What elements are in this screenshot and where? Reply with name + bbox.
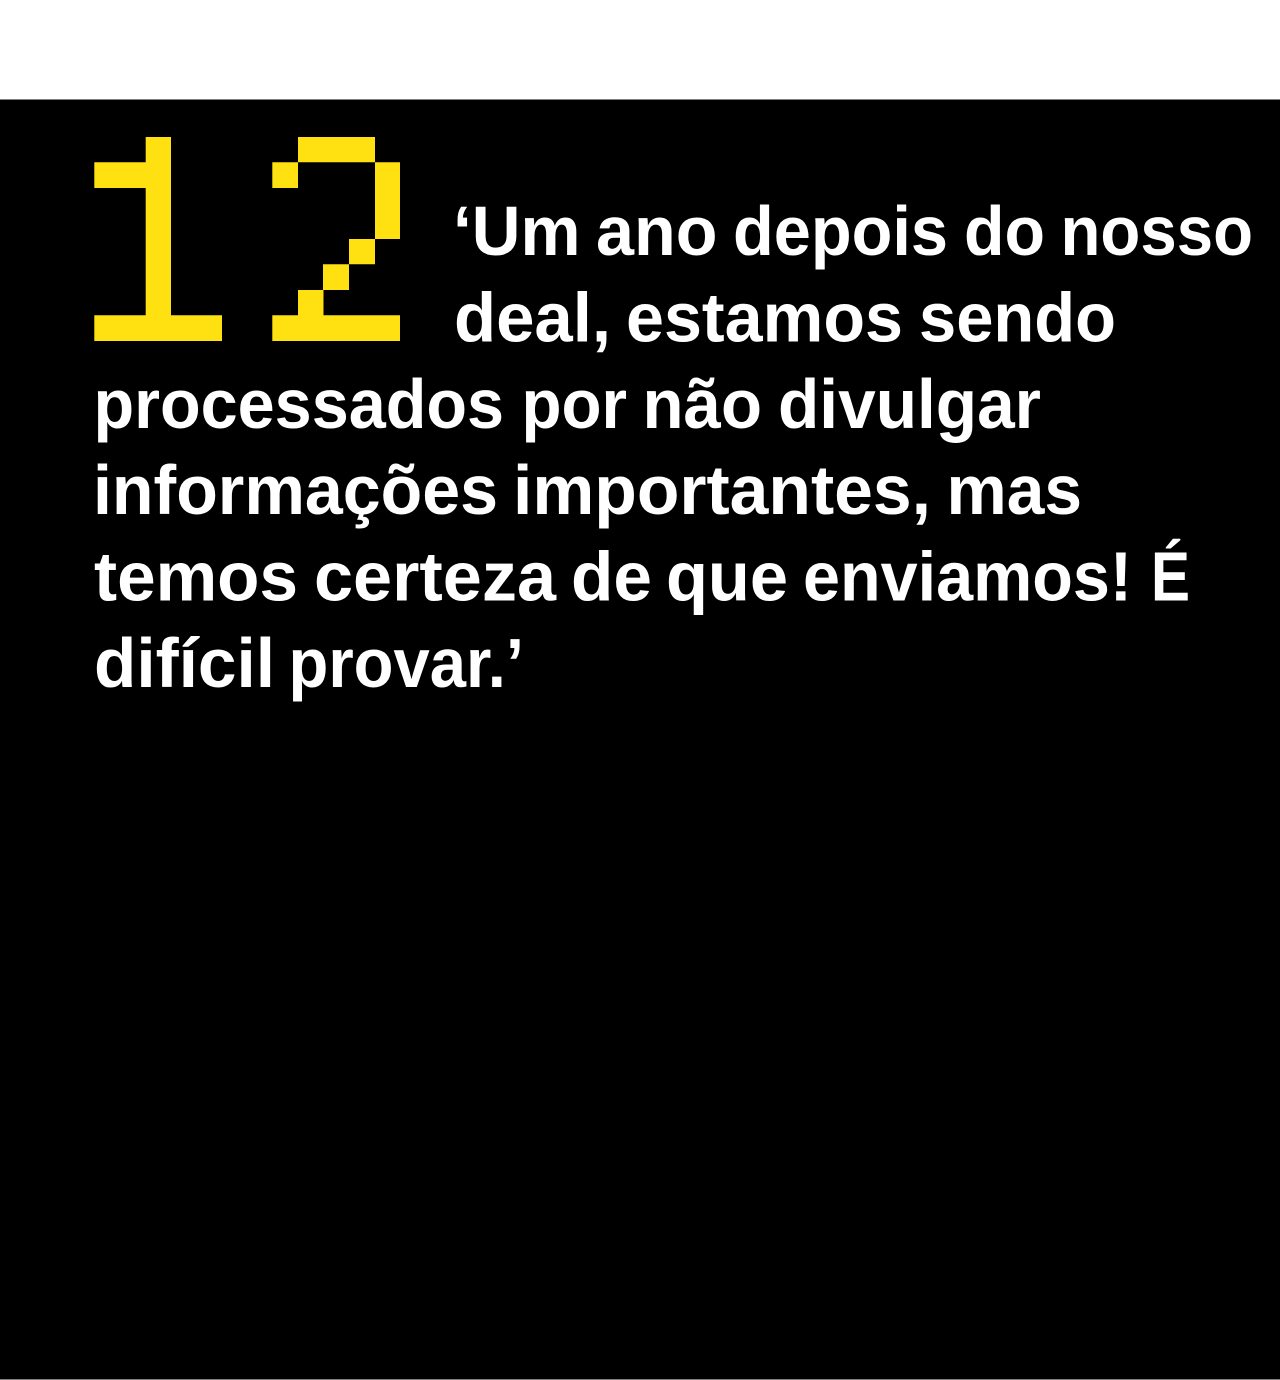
quote text: ano xyxy=(596,192,718,270)
quote text: estamos xyxy=(626,278,903,356)
quote text: que xyxy=(666,538,788,616)
quote text: É xyxy=(1151,538,1190,616)
quote text: por xyxy=(522,365,627,443)
quote text: depois xyxy=(733,192,948,270)
quote text: temos xyxy=(94,538,298,616)
pixel numeral 12 xyxy=(94,137,400,341)
quote text: mas xyxy=(946,451,1082,529)
quote text: importantes, xyxy=(513,451,931,529)
quote text: certeza xyxy=(314,538,557,616)
quote text: ‘Um xyxy=(453,192,580,270)
quote text: de xyxy=(571,538,652,616)
quote text: deal, xyxy=(454,278,611,356)
quote text: provar.’ xyxy=(288,624,524,702)
quote text: informações xyxy=(93,451,498,529)
quote text xyxy=(93,192,1253,702)
quote text: divulgar xyxy=(778,365,1041,443)
quote text: não xyxy=(642,365,762,443)
quote text: do xyxy=(964,192,1045,270)
quote text: sendo xyxy=(919,278,1116,356)
quote text: enviamos! xyxy=(803,538,1132,616)
quote text: nosso xyxy=(1060,192,1253,270)
quote text: processados xyxy=(94,365,504,443)
quote text: difícil xyxy=(94,624,275,702)
